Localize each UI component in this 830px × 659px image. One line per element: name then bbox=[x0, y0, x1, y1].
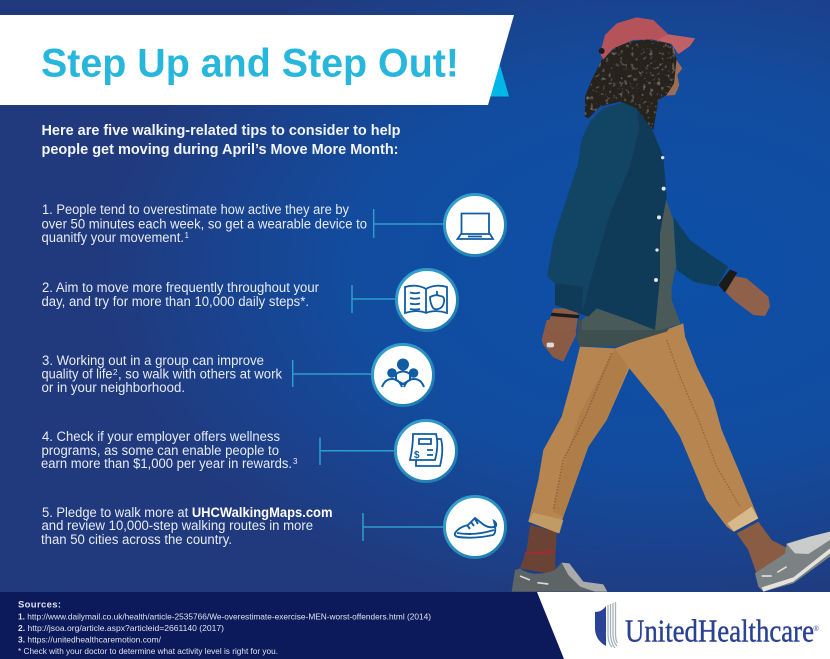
tip 3 icon: group of people bbox=[372, 344, 434, 406]
intro text: Here are five walking-related tips to consider to help bbox=[42, 122, 400, 139]
tip 4 bbox=[41, 420, 456, 482]
tip 4 connector bbox=[320, 438, 397, 465]
tip 1 bbox=[42, 194, 506, 256]
tip 1 text: 1 bbox=[184, 231, 190, 240]
tip 2 connector bbox=[352, 285, 398, 313]
intro text bbox=[42, 122, 400, 158]
tip 2 bbox=[42, 270, 458, 330]
tip 5 text: 5. Pledge to walk more at UHCWalkingMaps.com bbox=[42, 505, 332, 520]
title: Step Up and Step Out! bbox=[41, 42, 459, 86]
logo shield bbox=[595, 602, 618, 648]
tip 4 icon: pay documents bbox=[396, 420, 456, 482]
photo: walking person bbox=[512, 17, 830, 592]
sources text: 1. http://www.dailymail.co.uk/health/article-2535766/We-overestimate-exercise-MEN-worst-offenders.html (2014) bbox=[18, 612, 431, 622]
accent triangle bbox=[487, 62, 509, 96]
tip 1 text: 1. People tend to overestimate how active they are by bbox=[42, 202, 349, 217]
tip 1 text: quanitfy your movement. bbox=[42, 230, 184, 245]
tip 1 icon: laptop bbox=[444, 194, 506, 256]
tip 5 text: and review 10,000-step walking routes in more bbox=[42, 518, 313, 533]
tip 4 text: programs, as some can enable people to bbox=[42, 443, 279, 458]
tip 4 text bbox=[41, 429, 298, 471]
tip 5 connector bbox=[363, 513, 446, 541]
tip 5 text: than 50 cities across the country. bbox=[41, 532, 232, 547]
tip 3 text: 2 bbox=[113, 368, 118, 377]
sources text: * Check with your doctor to determine what activity level is right for you. bbox=[18, 646, 278, 656]
lower body: legs, trousers and shoes bbox=[512, 320, 830, 592]
tip 4 text: 3 bbox=[293, 457, 298, 466]
footer: sources panel bbox=[0, 592, 570, 659]
sources text: 2. http://jsoa.org/article.aspx?articleid=2661140 (2017) bbox=[18, 623, 224, 633]
sources text: 3. https://unitedhealthcaremotion.com/ bbox=[18, 634, 162, 644]
tip 3 text bbox=[42, 353, 282, 395]
tip 2 text bbox=[42, 280, 319, 309]
tip 1 text bbox=[42, 202, 367, 245]
tip 2 text: 2. Aim to move more frequently throughout your bbox=[42, 280, 319, 295]
tip 4 text: 4. Check if your employer offers wellness bbox=[42, 429, 280, 444]
tip 1 connector bbox=[374, 209, 446, 238]
tip 4 text: earn more than $1,000 per year in rewards. bbox=[41, 456, 292, 471]
tip 3 text: 3. Working out in a group can improve bbox=[42, 353, 264, 368]
tip 5 text bbox=[41, 505, 332, 547]
tip 5 bbox=[41, 496, 506, 558]
tip 3 connector bbox=[293, 360, 374, 387]
tip 3 text: or in your neighborhood. bbox=[42, 380, 185, 395]
tip 5 icon: sneaker bbox=[444, 496, 506, 558]
tip 3 text: quality of life bbox=[42, 366, 112, 382]
tip 2 icon: book with apple bbox=[396, 270, 458, 330]
registered mark: ® bbox=[814, 625, 820, 633]
tip 4 icon: pay documents: $ bbox=[414, 450, 420, 461]
logo panel bbox=[537, 592, 830, 659]
tip 2 text: day, and try for more than 10,000 daily steps*. bbox=[42, 294, 309, 309]
title banner bbox=[0, 15, 514, 105]
tip 1 text: over 50 minutes each week, so get a wearable device to bbox=[42, 216, 367, 232]
sources text: Sources: bbox=[18, 600, 61, 610]
sources text bbox=[18, 600, 431, 656]
upper body: jacket, hair, face and cap bbox=[546, 17, 770, 330]
intro text: people get moving during April’s Move More Month: bbox=[42, 141, 398, 158]
tip 3 text: , so walk with others at work bbox=[118, 366, 282, 382]
tip 3 bbox=[42, 344, 434, 406]
